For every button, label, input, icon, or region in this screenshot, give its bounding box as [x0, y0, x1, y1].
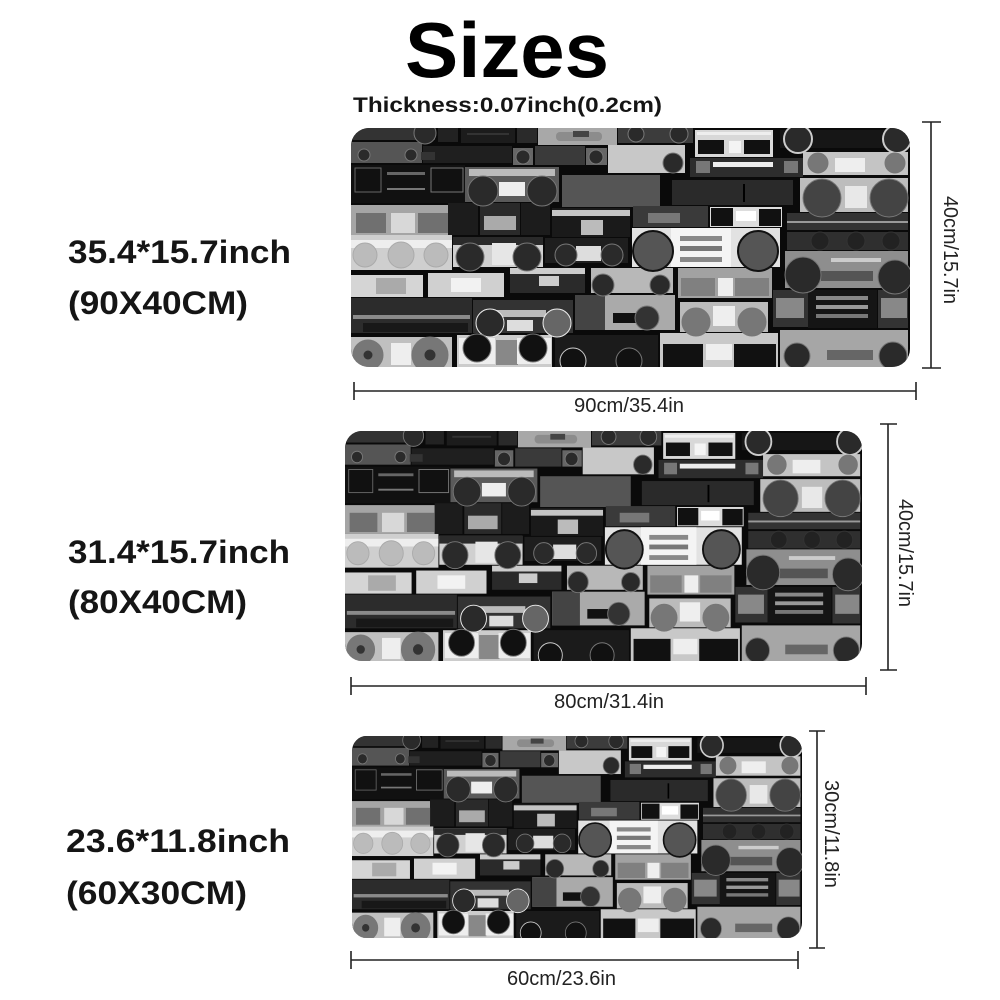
- large size label: [68, 234, 291, 321]
- large size label: 35.4*15.7inch: [68, 234, 291, 270]
- small size label: [66, 823, 290, 911]
- medium size label: (80X40CM): [68, 584, 247, 620]
- small mat width dimension: 60cm/23.6in: [507, 968, 616, 990]
- medium mat height dimension: [880, 424, 916, 670]
- small mat width dimension: [351, 951, 798, 990]
- small size label: 23.6*11.8inch: [66, 823, 290, 859]
- large mat width dimension: 90cm/35.4in: [574, 395, 684, 417]
- large size label: (90X40CM): [68, 285, 248, 321]
- medium mat width dimension: 80cm/31.4in: [554, 691, 664, 713]
- large mat height dimension: [922, 122, 961, 368]
- medium mat height dimension: 40cm/15.7in: [894, 499, 916, 607]
- medium mat width dimension: [351, 677, 866, 713]
- medium size label: 31.4*15.7inch: [68, 534, 290, 570]
- thickness note: Thickness:0.07inch(0.2cm): [353, 94, 662, 117]
- title: Sizes: [405, 6, 609, 94]
- large mat image: [351, 122, 912, 374]
- large mat width dimension: [354, 382, 916, 417]
- small mat height dimension: [809, 731, 842, 948]
- small mat height dimension: 30cm/11.8in: [820, 780, 842, 888]
- large mat height dimension: 40cm/15.7in: [939, 196, 961, 304]
- medium mat image: [345, 425, 864, 668]
- small mat image: [352, 731, 804, 944]
- medium size label: [68, 534, 290, 620]
- small size label: (60X30CM): [66, 875, 247, 911]
